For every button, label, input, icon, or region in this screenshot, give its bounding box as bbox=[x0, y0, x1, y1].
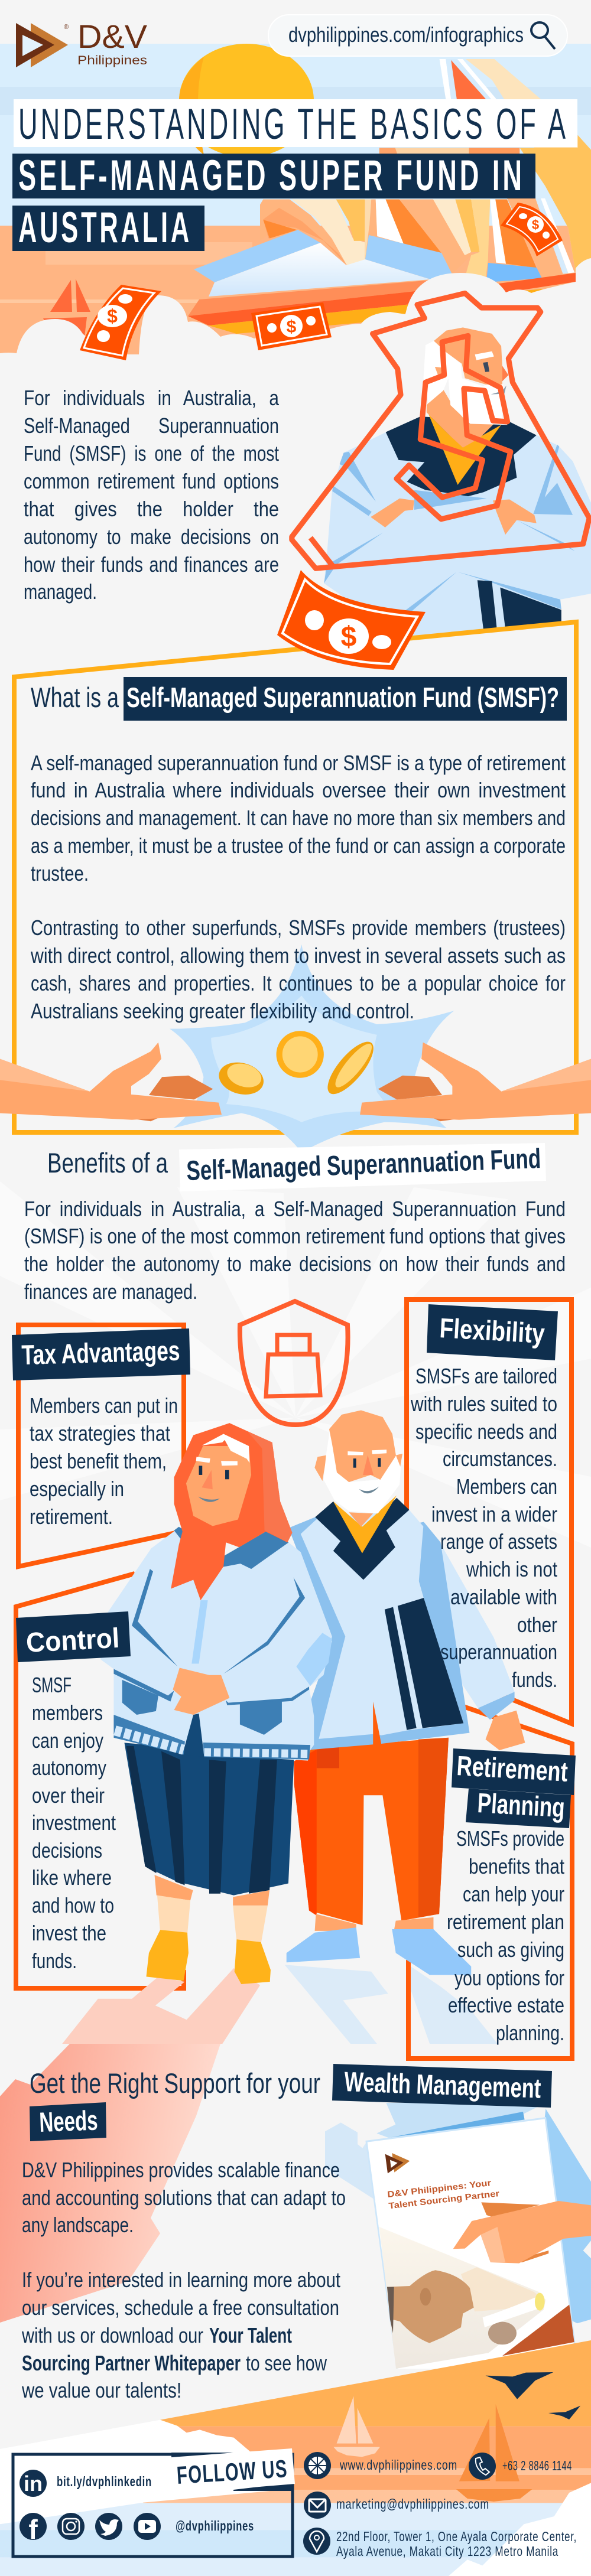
left hand bbox=[0, 1043, 222, 1121]
text: support paragraphs: Sourcing Partner Whitepaper bbox=[22, 2351, 241, 2375]
intro text: that gives the holder the bbox=[24, 497, 279, 521]
tax advantages text: best benefit them, bbox=[30, 1449, 167, 1473]
follow us panel: FOLLOW US bbox=[176, 2454, 288, 2489]
footer background bbox=[0, 2340, 591, 2576]
icon: linkedin bbox=[20, 2470, 47, 2497]
icon: instagram bbox=[57, 2513, 85, 2540]
collar bbox=[315, 1498, 409, 1580]
whitepaper cover bbox=[365, 2112, 591, 2369]
ankles bbox=[315, 1914, 433, 1933]
flexibility label bbox=[427, 1304, 558, 1360]
suit shadows bbox=[324, 445, 575, 615]
cover title bbox=[387, 2178, 500, 2211]
lower blue shapes behind whitepaper bbox=[325, 2103, 591, 2323]
search bar: dvphilippines.com/infographics bbox=[288, 22, 524, 47]
scarf bbox=[171, 1423, 292, 1600]
icon: web bbox=[304, 2452, 331, 2479]
intro text: For individuals in Australia, a bbox=[24, 386, 280, 410]
beard bbox=[324, 1431, 401, 1513]
icon: dollar bill right bbox=[501, 203, 563, 256]
control text: can enjoy bbox=[32, 1728, 103, 1753]
panel frame: tax advantages bbox=[18, 1325, 184, 1567]
retirement planning text: planning. bbox=[496, 2021, 564, 2045]
illustration: cloud bbox=[0, 258, 591, 378]
boats bbox=[333, 2396, 532, 2502]
contact details bbox=[303, 2452, 577, 2559]
text: smsf definition: trustee. bbox=[31, 861, 89, 885]
intro text: Fund (SMSF) is one of the most bbox=[24, 441, 279, 465]
background rays bbox=[0, 1181, 591, 1548]
icon: large dollar bill: $ bbox=[341, 621, 357, 653]
illustration: small sailboat bbox=[43, 279, 90, 337]
text: support paragraphs: Your Talent bbox=[209, 2323, 292, 2347]
illustration: opera house sails bbox=[260, 59, 591, 278]
intro text: how their funds and finances are bbox=[24, 552, 279, 577]
panel frame: flexibility bbox=[407, 1300, 571, 1724]
logo bbox=[16, 18, 148, 67]
face bbox=[348, 1450, 387, 1493]
pointing hand bbox=[453, 2201, 591, 2264]
heading: benefits: Benefits of a bbox=[47, 1147, 168, 1178]
top sky and sea background bbox=[0, 44, 591, 367]
icon: dollar bill left: $ bbox=[107, 305, 118, 327]
cuff and hand bbox=[478, 1692, 525, 1750]
retirement planning text bbox=[447, 1826, 564, 2045]
icon: dollar bill left bbox=[80, 285, 161, 360]
burst bbox=[170, 945, 454, 1152]
flexibility text: funds. bbox=[512, 1668, 557, 1692]
follow us panel: @dvphilippines bbox=[176, 2518, 254, 2533]
icon: location pin bbox=[303, 2528, 330, 2555]
retirement planning text: retirement plan bbox=[447, 1910, 564, 1934]
control text: over their bbox=[32, 1783, 105, 1808]
sweater seams bbox=[113, 1569, 309, 1705]
shoes bbox=[287, 1927, 471, 1975]
heading: get the right support bbox=[30, 2064, 552, 2141]
heading: what is a SMSF bbox=[31, 677, 567, 721]
flexibility text: with rules suited to bbox=[410, 1392, 557, 1416]
cover title: D&V Philippines: Your bbox=[387, 2178, 492, 2200]
trousers bbox=[294, 1738, 449, 1925]
cover logo bbox=[385, 2153, 410, 2173]
skirt centre bbox=[183, 1714, 204, 1757]
control text: funds. bbox=[32, 1949, 77, 1973]
tax advantages label: Tax Advantages bbox=[21, 1335, 180, 1370]
text: support paragraphs: our services, schedule a free consultation bbox=[22, 2295, 339, 2320]
hands bbox=[173, 1668, 229, 1715]
icon: linkedin: in bbox=[24, 2471, 43, 2496]
control label: Control bbox=[25, 1622, 120, 1658]
illustration: sun bbox=[179, 44, 314, 157]
flexibility text: superannuation bbox=[440, 1640, 557, 1664]
woman legs bbox=[154, 1875, 269, 1945]
control text: investment bbox=[32, 1810, 116, 1835]
intro text: common retirement fund options bbox=[24, 469, 279, 493]
bag outline bbox=[292, 293, 589, 568]
text: support paragraphs: If you’re interested in learning more about bbox=[22, 2268, 340, 2292]
text: benefits intro bbox=[24, 1197, 566, 1304]
control text: autonomy bbox=[32, 1756, 106, 1780]
control text: like where bbox=[32, 1865, 112, 1890]
flexibility text bbox=[410, 1364, 557, 1692]
flexibility text: range of assets bbox=[440, 1529, 557, 1554]
tax advantages label bbox=[12, 1328, 190, 1380]
logo: ® bbox=[64, 24, 69, 31]
text: support paragraphs bbox=[21, 2158, 346, 2402]
collar bbox=[386, 416, 537, 496]
icon: mail bbox=[304, 2492, 331, 2519]
flexibility text: invest in a wider bbox=[431, 1502, 557, 1526]
retirement planning text: benefits that bbox=[469, 1854, 564, 1878]
icon: dollar bill centre: $ bbox=[287, 317, 297, 337]
sweater centre strip bbox=[191, 1600, 208, 1664]
icon: twitter bbox=[95, 2513, 122, 2540]
text: smsf definition bbox=[30, 751, 566, 1023]
retirement planning text: can help your bbox=[463, 1882, 564, 1906]
flexibility text: circumstances. bbox=[443, 1447, 557, 1471]
intro text: autonomy to make decisions on bbox=[24, 525, 279, 549]
cover title: Talent Sourcing Partner bbox=[388, 2189, 500, 2211]
control text: and how to bbox=[32, 1893, 114, 1917]
heading: get the right support: Needs bbox=[38, 2105, 98, 2138]
control text: SMSF bbox=[32, 1673, 72, 1697]
woman skirt bbox=[124, 1743, 294, 1896]
control text: invest the bbox=[32, 1921, 106, 1945]
sweater ribs bbox=[113, 1715, 310, 1760]
icon: magnifier bbox=[531, 22, 555, 49]
pocket stripes bbox=[478, 580, 561, 631]
contact details: www.dvphilippines.com bbox=[339, 2457, 457, 2473]
intro text: managed. bbox=[24, 579, 97, 604]
search bar bbox=[268, 15, 567, 56]
icon: dollar bill centre bbox=[251, 302, 332, 350]
follow us panel: bit.ly/dvphlinkedin bbox=[57, 2474, 152, 2489]
retirement planning text: such as giving bbox=[457, 1937, 564, 1962]
tie bbox=[428, 415, 501, 485]
woman sweater bbox=[100, 1530, 332, 1761]
pink shape behind support text bbox=[0, 2044, 220, 2323]
woman face bbox=[186, 1434, 251, 1526]
text: support paragraphs: D&V Philippines provides scalable finance bbox=[22, 2158, 340, 2182]
flexibility text: other bbox=[517, 1613, 557, 1637]
panel: what is a SMSF frame bbox=[14, 622, 576, 1132]
icon: dollar bill right: $ bbox=[532, 217, 539, 232]
heading: benefits bbox=[47, 1142, 546, 1191]
contact details: marketing@dvphilippines.com bbox=[336, 2496, 489, 2512]
ears bbox=[314, 1454, 402, 1481]
heading: get the right support: Get the Right Support for your bbox=[30, 2067, 320, 2099]
neck bbox=[427, 387, 494, 448]
cover corner bbox=[502, 2305, 574, 2356]
heading: what is a SMSF: What is a bbox=[31, 682, 119, 713]
icon: facebook: f bbox=[28, 2514, 38, 2545]
man arm bbox=[418, 1522, 515, 1708]
panel frame: retirement planning bbox=[408, 1707, 572, 2059]
tax advantages text bbox=[30, 1393, 178, 1529]
control label bbox=[16, 1611, 131, 1662]
tax advantages text: retirement. bbox=[30, 1504, 113, 1529]
control text: decisions bbox=[32, 1838, 102, 1862]
text: benefits intro: finances are managed. bbox=[24, 1279, 197, 1304]
tax advantages text: tax strategies that bbox=[30, 1421, 170, 1445]
retirement planning label bbox=[452, 1748, 576, 1828]
head bbox=[434, 327, 502, 385]
cover photo: handshake bbox=[379, 2227, 545, 2369]
woman shoes bbox=[146, 1930, 271, 1984]
right hand bbox=[360, 1043, 591, 1121]
icon: shield with padlock bbox=[240, 1301, 348, 1425]
icon: large dollar bill bbox=[277, 570, 426, 670]
text: support paragraphs: we value our talents! bbox=[21, 2378, 181, 2402]
flexibility label: Flexibility bbox=[439, 1312, 545, 1349]
shadows of couple bbox=[62, 1965, 498, 2044]
panel frame: control bbox=[16, 1574, 184, 1988]
head bbox=[329, 1411, 396, 1482]
hands bbox=[371, 499, 537, 535]
man upper body bbox=[100, 1411, 469, 1761]
retirement planning text: you options for bbox=[454, 1966, 564, 1990]
beard bbox=[424, 341, 508, 425]
text: smsf definition: Australians seeking greater flexibility and control. bbox=[31, 999, 414, 1023]
illustration: old man and woman bbox=[100, 1411, 525, 1984]
title bbox=[12, 99, 577, 252]
flexibility text: specific needs and bbox=[415, 1419, 557, 1444]
coins bbox=[212, 1031, 382, 1101]
text: support paragraphs: any landscape. bbox=[22, 2213, 134, 2237]
icon: facebook bbox=[20, 2513, 47, 2545]
intro text bbox=[24, 386, 280, 604]
text: support paragraphs: with us or download our bbox=[21, 2323, 203, 2347]
sleeve cuff bbox=[296, 1633, 332, 1686]
icon: phone bbox=[469, 2453, 496, 2480]
birds bbox=[485, 2372, 580, 2419]
follow us panel bbox=[13, 2448, 295, 2557]
illustration: opera house base bbox=[188, 230, 576, 334]
title: AUSTRALIA bbox=[18, 204, 192, 252]
text: support paragraphs: to see how bbox=[246, 2351, 327, 2375]
pockets bbox=[122, 1680, 282, 1735]
logo: Philippines bbox=[77, 54, 147, 67]
man lower body bbox=[124, 1522, 525, 1984]
flexibility text: available with bbox=[450, 1585, 557, 1609]
suit bbox=[324, 432, 591, 638]
flexibility text: Members can bbox=[456, 1474, 557, 1499]
face details bbox=[435, 351, 508, 395]
icon: youtube bbox=[134, 2513, 161, 2540]
control text bbox=[32, 1673, 116, 1973]
tax advantages text: Members can put in bbox=[30, 1393, 178, 1418]
clouds bbox=[0, 2420, 591, 2576]
control text: members bbox=[32, 1701, 103, 1725]
illustration: burst, coins and hands bbox=[0, 945, 591, 1152]
logo: D&V bbox=[77, 18, 148, 55]
sweater collar bbox=[174, 1527, 288, 1569]
tax advantages text: especially in bbox=[30, 1477, 124, 1501]
text: support paragraphs: and accounting solutions that can adapt to bbox=[22, 2186, 346, 2210]
illustration: man in money bag bbox=[292, 293, 591, 638]
retirement planning text: effective estate bbox=[448, 1993, 564, 2017]
intro text: Self-Managed Superannuation bbox=[24, 413, 279, 438]
flexibility text: which is not bbox=[466, 1557, 557, 1581]
